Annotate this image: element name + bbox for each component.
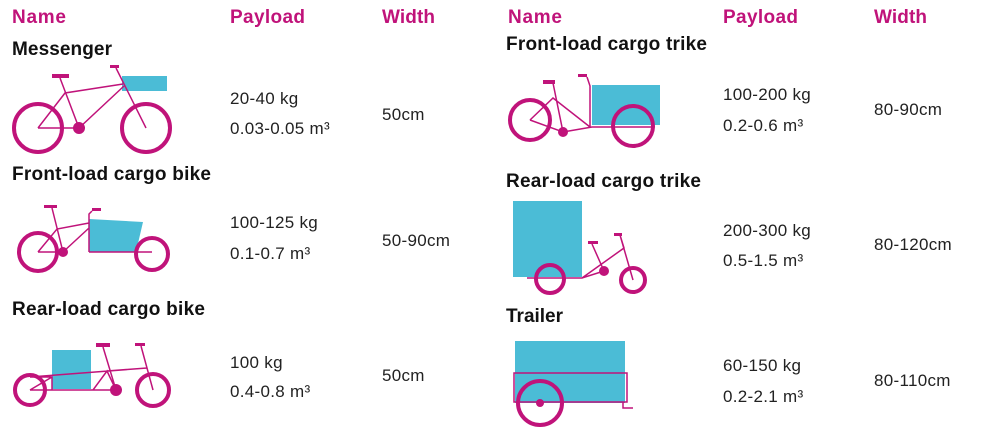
row: Trailer: 80-110cm [874, 371, 951, 390]
row: Rear-load cargo bike: 50cm [382, 366, 425, 385]
row: Rear-load cargo trike: 200-300 kg [723, 221, 811, 240]
row: Trailer: 0.2-2.1 m³ [723, 387, 804, 406]
icon: trailer [514, 341, 633, 425]
row: Front-load cargo bike: 100-125 kg [230, 213, 318, 232]
icon: rear-load trike [513, 201, 645, 293]
row: Trailer: Trailer [506, 306, 564, 327]
icon: front-load bike [19, 205, 168, 271]
icon: front-load trike [510, 74, 660, 146]
headers: Name [508, 7, 562, 28]
row: Front-load cargo trike: Front-load cargo trike [506, 34, 707, 55]
icon: rear-load bike [15, 343, 169, 406]
row: Rear-load cargo trike: Rear-load cargo trike [506, 171, 701, 192]
row: Rear-load cargo bike: 100 kg [230, 353, 283, 372]
row: Rear-load cargo bike: Rear-load cargo bike [12, 299, 205, 320]
row: Trailer: 60-150 kg [723, 356, 801, 375]
row: Messenger: 50cm [382, 105, 425, 124]
row: Messenger [12, 39, 425, 152]
icon: messenger bike [14, 65, 170, 152]
row: Rear-load cargo trike [506, 171, 952, 293]
row: Rear-load cargo trike: 0.5-1.5 m³ [723, 251, 804, 270]
row: Messenger: 20-40 kg [230, 89, 299, 108]
row: Front-load cargo bike [12, 164, 450, 271]
row: Front-load cargo trike: 0.2-0.6 m³ [723, 116, 804, 135]
row: Front-load cargo bike: 50-90cm [382, 231, 450, 250]
row: Front-load cargo trike [506, 34, 942, 146]
row: Messenger: 0.03-0.05 m³ [230, 119, 330, 138]
row: Front-load cargo bike: Front-load cargo bike [12, 164, 211, 185]
headers: Payload [723, 7, 798, 28]
headers [12, 7, 927, 28]
row: Front-load cargo trike: 80-90cm [874, 100, 942, 119]
headers: Payload [230, 7, 305, 28]
row: Rear-load cargo bike: 0.4-0.8 m³ [230, 382, 311, 401]
headers: Width [874, 7, 927, 28]
row: Front-load cargo trike: 100-200 kg [723, 85, 811, 104]
headers: Name [12, 7, 66, 28]
headers: Width [382, 7, 435, 28]
row: Rear-load cargo bike [12, 299, 425, 406]
row: Messenger: Messenger [12, 39, 113, 60]
row: Front-load cargo bike: 0.1-0.7 m³ [230, 244, 311, 263]
row: Rear-load cargo trike: 80-120cm [874, 235, 952, 254]
row: Trailer [506, 306, 951, 425]
